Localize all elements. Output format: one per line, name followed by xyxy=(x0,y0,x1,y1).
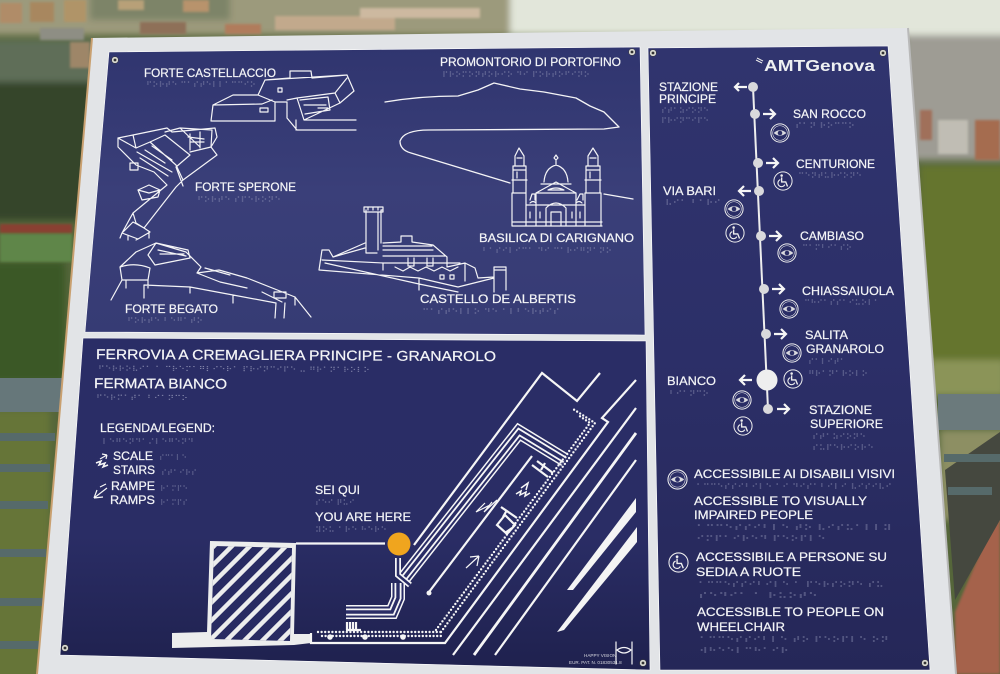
stop: Stazione Principe: STAZIONE xyxy=(659,80,718,94)
stop: Cambiaso xyxy=(778,229,864,262)
accessibility key: wheelchair: ⠁⠉⠉⠑⠎⠎⠊⠃⠇⠑ ⠞⠕ ⠏⠑⠕⠏⠇⠑ ⠕⠝ xyxy=(699,636,889,644)
label: Basilica di Carignano: BASILICA DI CARIGNANO xyxy=(479,231,634,245)
stop: Stazione Principe: ⠎⠞⠁⠵⠊⠕⠝⠑ xyxy=(661,107,709,115)
drawing: Forte Castellaccio xyxy=(211,71,356,130)
legend xyxy=(94,421,215,507)
stop: Salita Granarolo: ⠎⠁⠇⠊⠞⠁ xyxy=(808,358,846,366)
accessibility key: visually impaired: ⠊⠍⠏⠁⠊⠗⠑⠙ ⠏⠑⠕⠏⠇⠑ xyxy=(696,535,826,543)
heading: railway line: FERROVIA A CREMAGLIERA PRINCIPE - GRANAROLO xyxy=(96,346,496,364)
legend heading: LEGENDA/LEGEND: xyxy=(100,421,215,435)
stop: Via Bari: VIA BARI xyxy=(663,184,716,198)
heading: Fermata Bianco xyxy=(94,375,227,403)
stop arrows xyxy=(735,83,789,414)
stop: Salita Granarolo: ⠛⠗⠁⠝⠁⠗⠕⠇⠕ xyxy=(808,370,868,378)
heading: Fermata Bianco: ⠋⠑⠗⠍⠁⠞⠁ ⠃⠊⠁⠝⠉⠕ xyxy=(96,394,188,402)
label: Forte Castellaccio: FORTE CASTELLACCIO xyxy=(144,66,276,80)
legend: stairs: ⠎⠞⠁⠊⠗⠎ xyxy=(161,469,197,477)
stop: Chiassaiuola: CHIASSAIUOLA xyxy=(802,284,894,298)
stop: Salita Granarolo xyxy=(783,328,884,388)
stop: Stazione Superiore: ⠎⠥⠏⠑⠗⠊⠕⠗⠑ xyxy=(812,444,874,452)
accessibility key: visually impaired: ACCESSIBLE TO VISUALLY xyxy=(694,494,867,508)
hatched station building xyxy=(172,532,311,648)
legend: ramps: ⠗⠁⠍⠏⠎ xyxy=(160,499,188,507)
stop: Stazione Superiore xyxy=(809,403,883,452)
drawing: Forte Begato xyxy=(111,243,311,318)
accessibility key: wheelchair: ACCESSIBILE A PERSONE SU xyxy=(696,550,887,564)
legend heading xyxy=(100,421,215,446)
stop: Salita Granarolo: SALITA xyxy=(805,328,848,342)
stop: Stazione Principe: ⠏⠗⠊⠝⠉⠊⠏⠑ xyxy=(661,117,709,125)
drawing: Castello De Albertis xyxy=(319,207,506,292)
stop: Stazione Superiore: ⠎⠞⠁⠵⠊⠕⠝⠑ xyxy=(812,433,866,441)
accessibility key: wheelchair xyxy=(669,550,889,655)
tactile dotted paving xyxy=(318,409,595,640)
label: Basilica di Carignano xyxy=(479,231,634,255)
stop: Cambiaso: CAMBIASO xyxy=(800,229,864,243)
label: Forte Begato xyxy=(125,302,218,325)
platform and track outlines xyxy=(311,373,637,655)
stop: Chiassaiuola: ⠉⠓⠊⠁⠎⠎⠁⠊⠥⠕⠇⠁ xyxy=(804,299,880,307)
accessibility key: visually impaired: ACCESSIBILE AI DISABILI VISIVI xyxy=(694,467,895,481)
stop: Via Bari xyxy=(663,184,744,242)
label: you are here xyxy=(315,483,411,534)
tactile guide paths xyxy=(346,432,565,612)
label: Forte Begato: ⠋⠕⠗⠞⠑ ⠃⠑⠛⠁⠞⠕ xyxy=(127,317,203,325)
label: Castello De Albertis xyxy=(420,292,576,316)
logo: Happy Vision xyxy=(569,642,632,665)
drawing: Basilica di Carignano xyxy=(512,148,602,226)
accessibility key: wheelchair: ⠎⠑⠙⠊⠁ ⠁ ⠗⠥⠕⠞⠑ xyxy=(698,592,818,600)
stop: Stazione Principe: PRINCIPE xyxy=(659,92,716,106)
label: you are here: SEI QUI xyxy=(315,483,360,497)
stop: Bianco: ⠃⠊⠁⠝⠉⠕ xyxy=(669,390,709,398)
label: Promontorio di Portofino xyxy=(440,55,621,79)
label: Castello De Albertis: ⠉⠁⠎⠞⠑⠇⠇⠕ ⠙⠑ ⠁⠇⠃⠑⠗⠞⠊⠎ xyxy=(422,308,560,316)
stop: Centurione: CENTURIONE xyxy=(796,157,875,171)
legend heading: ⠇⠑⠛⠑⠝⠙⠁⠌⠇⠑⠛⠑⠝⠙ xyxy=(102,438,194,446)
legend: ramps: RAMPE xyxy=(111,479,155,493)
stop: San Rocco: ⠎⠁⠝ ⠗⠕⠉⠉⠕ xyxy=(795,122,855,130)
accessibility key: wheelchair: ⠁⠉⠉⠑⠎⠎⠊⠃⠊⠇⠑ ⠁ ⠏⠑⠗⠎⠕⠝⠑ ⠎⠥ xyxy=(698,581,884,589)
accessibility key: wheelchair: ⠺⠓⠑⠑⠇⠉⠓⠁⠊⠗ xyxy=(699,647,789,655)
stop: Centurione xyxy=(774,157,875,190)
stop: Cambiaso: ⠉⠁⠍⠃⠊⠁⠎⠕ xyxy=(802,244,852,252)
accessibility key: visually impaired xyxy=(668,467,895,543)
accessibility key: visually impaired: ⠁⠉⠉⠑⠎⠎⠊⠃⠊⠇⠑ ⠁⠊ ⠙⠊⠎⠁⠃⠊⠇⠊ ⠧⠊⠎⠊⠧⠊ xyxy=(696,483,892,491)
accessibility key: visually impaired: ⠁⠉⠉⠑⠎⠎⠊⠃⠇⠑ ⠞⠕ ⠧⠊⠎⠥⠁⠇⠇⠽ xyxy=(696,524,892,532)
panel: line diagram xyxy=(648,46,930,670)
label: Promontorio di Portofino: ⠏⠗⠕⠍⠕⠝⠞⠕⠗⠊⠕ ⠙⠊ ⠏⠕⠗⠞⠕⠋⠊⠝⠕ xyxy=(442,71,590,79)
accessibility key: wheelchair: WHEELCHAIR xyxy=(697,620,785,634)
stop: Bianco xyxy=(667,374,752,435)
stop: Bianco: BIANCO xyxy=(667,374,716,388)
stop: Centurione: ⠉⠑⠝⠞⠥⠗⠊⠕⠝⠑ xyxy=(798,172,862,180)
label: Forte Sperone: FORTE SPERONE xyxy=(195,180,296,194)
label: you are here: ⠎⠑⠊ ⠟⠥⠊ xyxy=(315,499,355,507)
label: you are here: YOU ARE HERE xyxy=(315,510,411,524)
label: Forte Sperone: ⠋⠕⠗⠞⠑ ⠎⠏⠑⠗⠕⠝⠑ xyxy=(197,196,281,204)
logo: Happy Vision: HAPPY VISION xyxy=(584,653,616,658)
stop: Salita Granarolo: GRANAROLO xyxy=(806,342,884,356)
stop: San Rocco xyxy=(771,107,866,142)
stop: Stazione Superiore: SUPERIORE xyxy=(810,417,883,431)
legend: stairs: SCALE xyxy=(113,449,153,463)
rail line with stops xyxy=(748,82,778,414)
legend: ramps xyxy=(94,479,188,507)
stop: Stazione Principe xyxy=(659,80,718,125)
drawing: Portofino promontory outline xyxy=(385,83,633,199)
heading: railway line xyxy=(96,346,496,375)
accessibility key: wheelchair: ACCESSIBLE TO PEOPLE ON xyxy=(697,605,884,619)
accessibility key: wheelchair: SEDIA A RUOTE xyxy=(696,565,801,579)
legend: ramps: RAMPS xyxy=(110,493,155,507)
stop: San Rocco: SAN ROCCO xyxy=(793,107,866,121)
heading: Fermata Bianco: FERMATA BIANCO xyxy=(94,375,227,392)
label: Basilica di Carignano: ⠃⠁⠎⠊⠇⠊⠉⠁ ⠙⠊ ⠉⠁⠗⠊⠛⠝⠁⠝⠕ xyxy=(482,247,612,255)
heading: railway line: ⠋⠑⠗⠗⠕⠧⠊⠁ ⠁ ⠉⠗⠑⠍⠁⠛⠇⠊⠑⠗⠁ ⠏⠗⠊⠝⠉⠊⠏⠑ ⠤ ⠛⠗⠁⠝⠁⠗⠕⠇⠕ xyxy=(98,365,370,374)
legend: stairs: ⠎⠉⠁⠇⠑ xyxy=(159,454,187,462)
label: Forte Sperone xyxy=(195,180,296,204)
small stairs and ramp markers xyxy=(346,461,553,630)
panel: station plan xyxy=(60,338,650,670)
logo: AMT Genova: AMTGenova xyxy=(764,58,875,75)
legend: stairs: STAIRS xyxy=(113,463,155,477)
label: Forte Begato: FORTE BEGATO xyxy=(125,302,218,316)
panel: landmarks map xyxy=(85,47,645,335)
legend: ramps: ⠗⠁⠍⠏⠑ xyxy=(160,485,188,493)
label: Forte Castellaccio: ⠋⠕⠗⠞⠑ ⠉⠁⠎⠞⠑⠇⠇⠁⠉⠉⠊⠕ xyxy=(146,81,256,89)
label: you are here: ⠽⠕⠥ ⠁⠗⠑ ⠓⠑⠗⠑ xyxy=(315,526,387,534)
label: Castello De Albertis: CASTELLO DE ALBERTIS xyxy=(420,292,576,306)
drawing: Forte Sperone xyxy=(118,128,217,240)
accessibility key: visually impaired: IMPAIRED PEOPLE xyxy=(694,508,813,522)
label: Forte Castellaccio xyxy=(144,66,276,89)
legend: stairs xyxy=(96,449,197,477)
marker: you are here dot xyxy=(296,532,410,556)
stop: Via Bari: ⠧⠊⠁ ⠃⠁⠗⠊ xyxy=(665,199,721,207)
stop: Chiassaiuola xyxy=(780,284,894,318)
logo: Happy Vision: EUR. PAT. N. 01830531.8 xyxy=(569,660,622,665)
stop: Stazione Superiore: STAZIONE xyxy=(809,403,872,417)
label: Promontorio di Portofino: PROMONTORIO DI PORTOFINO xyxy=(440,55,621,69)
